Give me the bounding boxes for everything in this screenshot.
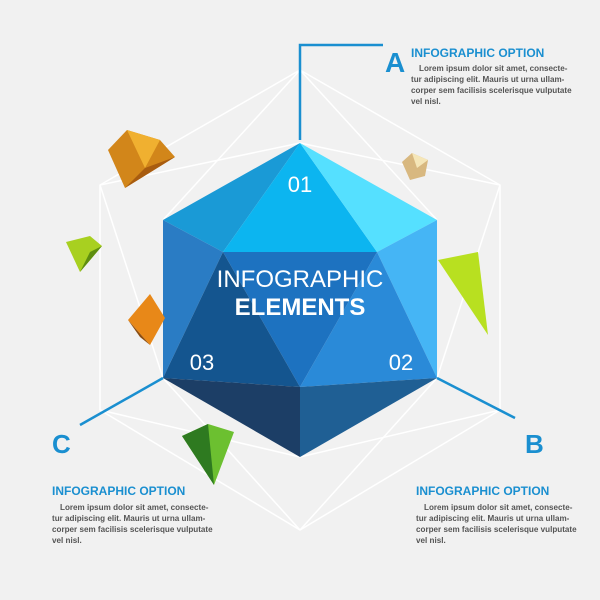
central hexagon xyxy=(163,143,437,457)
option C: corper sem facilisis scelerisque vulputate xyxy=(52,525,213,534)
option B: INFOGRAPHIC OPTION xyxy=(416,484,549,498)
title: ELEMENTS xyxy=(235,294,365,321)
option A xyxy=(385,46,572,106)
option B: B xyxy=(525,429,544,459)
central hexagon: 02 xyxy=(389,350,413,375)
option C: tur adipiscing elit. Mauris ut urna ullam- xyxy=(52,514,206,523)
option A: vel nisl. xyxy=(411,97,441,106)
central hexagon: 03 xyxy=(190,350,214,375)
central hexagon: 01 xyxy=(288,172,312,197)
title xyxy=(217,266,383,321)
title: INFOGRAPHIC xyxy=(217,266,383,293)
option A: tur adipiscing elit. Mauris ut urna ullam- xyxy=(411,75,565,84)
option B xyxy=(416,429,577,545)
option B: tur adipiscing elit. Mauris ut urna ullam- xyxy=(416,514,570,523)
connector lines xyxy=(80,45,515,425)
option B: Lorem ipsum dolor sit amet, consecte- xyxy=(424,503,573,512)
option A: Lorem ipsum dolor sit amet, consecte- xyxy=(419,64,568,73)
option C: INFOGRAPHIC OPTION xyxy=(52,484,185,498)
gems xyxy=(66,130,488,485)
option B: corper sem facilisis scelerisque vulputate xyxy=(416,525,577,534)
option C: vel nisl. xyxy=(52,536,82,545)
option B: vel nisl. xyxy=(416,536,446,545)
option C xyxy=(52,429,213,545)
option A: INFOGRAPHIC OPTION xyxy=(411,46,544,60)
option A: corper sem facilisis scelerisque vulputate xyxy=(411,86,572,95)
option C: Lorem ipsum dolor sit amet, consecte- xyxy=(60,503,209,512)
option A: A xyxy=(385,47,405,78)
option C: C xyxy=(52,429,71,459)
